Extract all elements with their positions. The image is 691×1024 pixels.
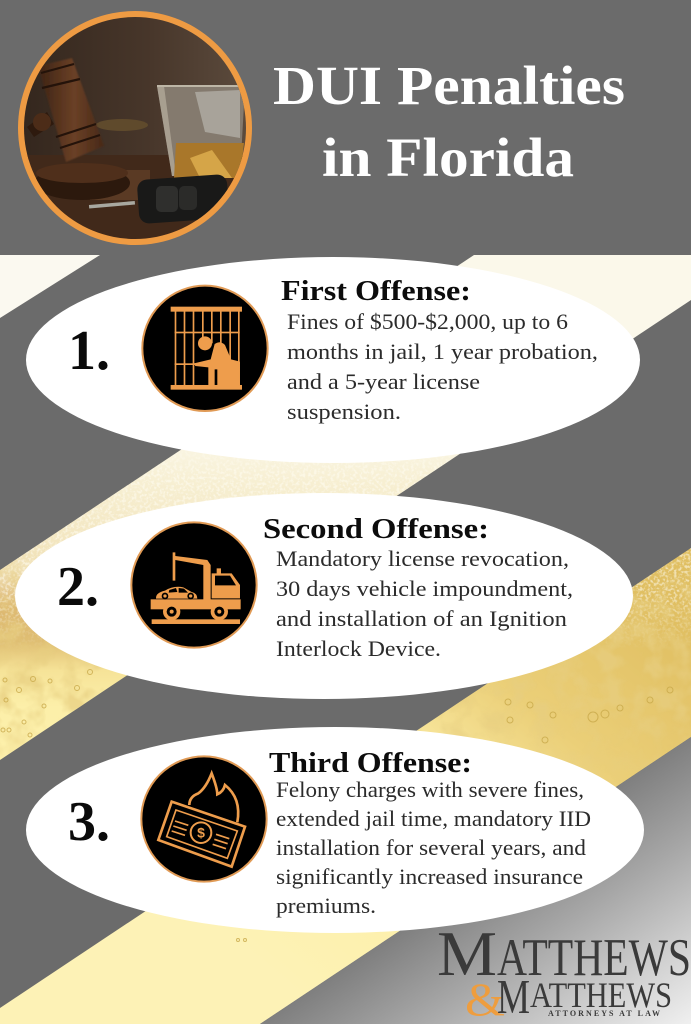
icon: burning money xyxy=(141,756,267,882)
icon: burning money: $ xyxy=(197,825,205,841)
text: second offense details: Interlock Device. xyxy=(276,636,441,661)
logo: Matthews & Matthews: M xyxy=(437,918,497,989)
text: third offense details: extended jail time, mandatory IID xyxy=(276,806,591,831)
text: first offense details: months in jail, 1 year probation, xyxy=(287,339,598,364)
photo: gavel, whisky glass and car key xyxy=(15,10,255,250)
text: third offense details xyxy=(276,777,591,918)
title: in Florida xyxy=(322,127,574,188)
beer texture background xyxy=(0,255,691,1024)
text: first offense details: suspension. xyxy=(287,399,401,424)
number 3: 3. xyxy=(68,791,110,853)
header background xyxy=(0,0,691,255)
text: second offense details: Mandatory license revocation, xyxy=(276,546,569,571)
panel: second offense xyxy=(15,493,633,699)
heading: second offense: Second Offense: xyxy=(263,513,489,545)
heading: third offense: Third Offense: xyxy=(269,747,472,779)
text: first offense details: Fines of $500-$2,000, up to 6 xyxy=(287,309,568,334)
logo corner gradient panel xyxy=(260,737,691,1024)
logo: Matthews & Matthews: ATTORNEYS AT LAW xyxy=(548,1009,660,1018)
panel: first offense xyxy=(26,257,640,463)
icon: tow truck with car xyxy=(131,522,257,648)
text: first offense details: and a 5-year license xyxy=(287,369,480,394)
text: third offense details: installation for several years, and xyxy=(276,835,586,860)
number 2: 2. xyxy=(57,556,99,618)
logo: Matthews & Matthews: M xyxy=(497,969,530,1024)
title xyxy=(273,55,625,188)
text: second offense details: and installation of an Ignition xyxy=(276,606,567,631)
title: DUI Penalties xyxy=(273,55,625,116)
icon: person in jail cell xyxy=(142,286,268,411)
text: third offense details: Felony charges with severe fines, xyxy=(276,777,584,802)
number 1: 1. xyxy=(68,320,110,382)
text: first offense details xyxy=(287,309,598,424)
logo: Matthews & Matthews xyxy=(437,918,691,1024)
text: second offense details xyxy=(276,546,573,661)
text: third offense details: significantly increased insurance xyxy=(276,864,583,889)
text: second offense details: 30 days vehicle impoundment, xyxy=(276,576,573,601)
text: third offense details: premiums. xyxy=(276,893,376,918)
heading: first offense: First Offense: xyxy=(281,275,471,307)
panel: third offense xyxy=(26,727,644,933)
